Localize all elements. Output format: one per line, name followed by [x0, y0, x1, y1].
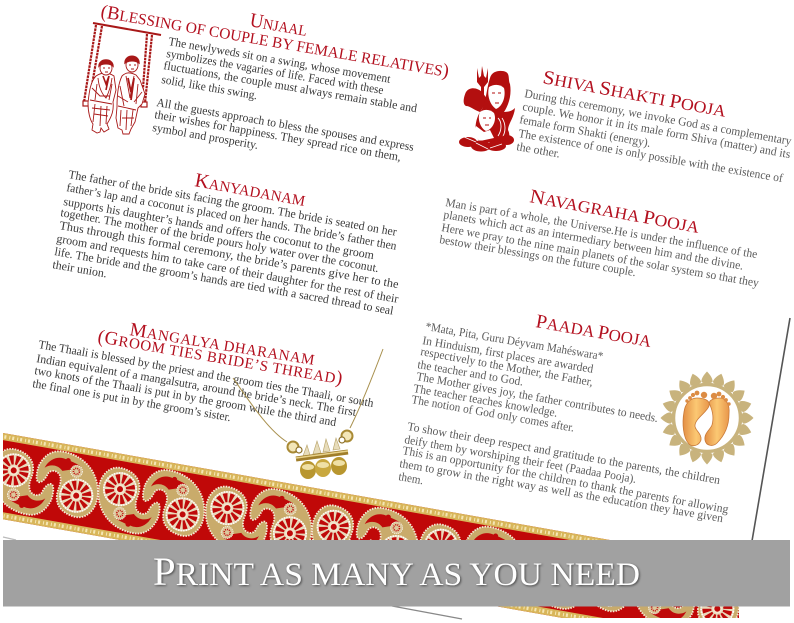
text block: Paada Pooja: This is an opportunity for the children to thank the parents for allowing	[401, 443, 730, 516]
icon: sacred feet in gold sunburst	[660, 372, 754, 464]
text block: Unjaal: symbol and prosperity.	[151, 120, 259, 152]
text block: Paada Pooja: *Mata, Pita, Guru Déyvam Mahéswara*	[424, 319, 604, 363]
Shakti face	[479, 110, 495, 131]
Shiva face	[488, 85, 505, 109]
hair flare lines	[498, 118, 505, 138]
text block: Navagraha Pooja: Man is part of a whole, the Universe.He is under the influence of the	[445, 195, 758, 261]
banner: print as many as you need: PRINT AS MANY AS YOU NEED	[153, 549, 640, 594]
text block: Paada Pooja: The Mother gives joy, the father contributes to needs.	[415, 369, 659, 425]
dragon snake	[464, 88, 488, 112]
banner: print as many as you need	[3, 540, 790, 606]
subheading: groom ties bride's thread: (GROOM TIES BRIDE’S THREAD)	[96, 326, 344, 389]
bride	[88, 73, 116, 133]
text block: Paada Pooja: The notion of God only comes after.	[410, 392, 575, 435]
text block: Shiva Shakti Pooja: couple. We honor it in its male form Shiva (matter) and its	[521, 99, 792, 161]
text block: Shiva Shakti Pooja: female form Shakti (energy).	[518, 112, 652, 150]
icon: gold thaali necklace	[233, 349, 383, 479]
text block: Paada Pooja: To show their deep respect and gratitude to the parents, the children	[406, 419, 721, 487]
text block: Unjaal: their wishes for happiness. They spread rice on them,	[153, 107, 402, 164]
text block: Unjaal	[151, 34, 418, 164]
text block: Kanyadanam: father’s lap and a coconut is placed on her hands. The bride’s father then	[65, 180, 398, 253]
icon: couple on swing	[83, 23, 161, 134]
page bottom edge	[392, 606, 462, 619]
hair and body	[476, 71, 515, 142]
heading: Mangalya Dharanam: MANGALYA DHARANAM	[128, 319, 316, 370]
text block: Kanyadanam: groom and requests him to take care of their daughter for the rest of their	[55, 231, 400, 306]
page right edge	[752, 318, 790, 541]
text block: Unjaal: fluctuations, the couple must always remain stable and	[162, 58, 418, 115]
text block: Kanyadanam: Thus through this formal ceremony, the bride’s parents give her to the	[58, 218, 400, 291]
text block: Kanyadanam	[51, 167, 400, 318]
text block: Paada Pooja: In Hinduism, first places are awarded	[421, 333, 594, 376]
text block: Paada Pooja: respectively to the Mother, the Father,	[419, 344, 594, 389]
groom	[116, 73, 145, 134]
text block: Unjaal: The newlyweds sit on a swing, whose movement	[167, 34, 392, 86]
text block: Shiva Shakti Pooja: The existence of one is only possible with the existence of	[517, 126, 784, 185]
decorative red paisley band	[3, 433, 739, 618]
text block: Kanyadanam: their union.	[51, 257, 108, 281]
heading: Unjaal: UNJAAL	[248, 9, 309, 41]
text block: Unjaal: solid, like this swing.	[160, 72, 258, 102]
text block: Mangalya Dharanam: the final one is put in by the groom’s sister.	[31, 376, 232, 424]
heading: Kanyadanam: KANYADANAM	[193, 169, 307, 211]
text block: Paada Pooja: deify them by worshiping their feet (Paadaa Pooja).	[403, 432, 637, 486]
text block: Paada Pooja	[397, 319, 730, 525]
text block: Navagraha Pooja: bestow their blessings on the future couple.	[438, 232, 637, 279]
text block: Navagraha Pooja: planets which act as an intermediary between him and the divine.	[442, 207, 744, 273]
text block: Navagraha Pooja: Here we pray to the nine main planets of the solar system so that they	[440, 220, 760, 290]
text block: Shiva Shakti Pooja	[515, 86, 793, 185]
icon: Shiva and Shakti	[459, 66, 515, 152]
text block: Navagraha Pooja	[438, 195, 760, 290]
text block: Paada Pooja: the teacher and to God.	[417, 357, 524, 389]
text block: Shiva Shakti Pooja: the other.	[515, 139, 561, 161]
text block: Paada Pooja: them to grow in the right way as well as the education they have given	[398, 456, 724, 525]
text block: Paada Pooja: them.	[397, 469, 425, 487]
text block: Kanyadanam: together. The mother of the bride pours holy water over the coconut.	[59, 205, 380, 275]
page lower left corner	[3, 537, 16, 540]
text block: Mangalya Dharanam: Indian equivalent of a mangalsutra, around the bride’s neck. The first	[35, 351, 358, 419]
text block: Unjaal: symbolizes the vagaries of life. Faced with these	[165, 46, 385, 97]
heading: Navagraha Pooja: NAVAGRAHA POOJA	[528, 186, 701, 238]
text block: Kanyadanam: The father of the bride sits facing the groom. The bride is seated on her	[67, 167, 398, 239]
heading: Paada Pooja: PAADA POOJA	[534, 311, 653, 352]
text block: Kanyadanam: life. The bride and the groom’s hands are tied with a sacred thread to seal	[53, 244, 395, 318]
subheading: blessing of couple: (BLESSING OF COUPLE BY FEMALE RELATIVES)	[99, 1, 451, 82]
text block: Kanyadanam: supports his daughter’s hands and offers the coconut to the groom	[62, 194, 376, 262]
lotus	[459, 137, 477, 147]
text block: Mangalya Dharanam: two knots of the Thaali is put in by the groom while the third and	[33, 363, 337, 429]
trident	[477, 66, 488, 100]
heading: Shiva Shakti Pooja: SHIVA SHAKTI POOJA	[541, 67, 728, 122]
text block: Unjaal: All the guests approach to bless the spouses and express	[155, 95, 415, 154]
text block: Mangalya Dharanam: The Thaali is blessed by the priest and the groom ties the Thaali, or south	[37, 337, 375, 410]
text block: Paada Pooja: The teacher teaches knowledge.	[412, 381, 559, 420]
